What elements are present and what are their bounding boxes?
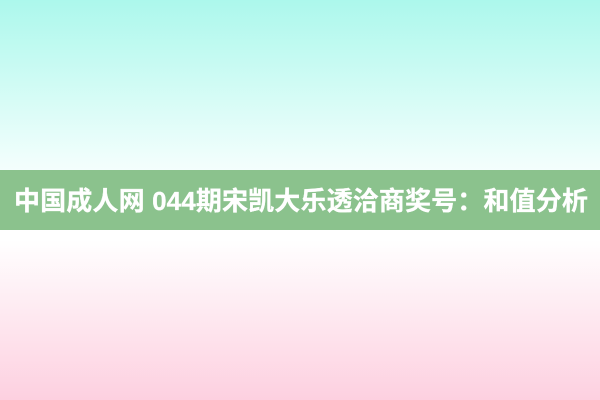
green title band: [0, 170, 600, 230]
title: 中国成人网 044期宋凯大乐透洽商奖号：和值分析: [14, 186, 588, 216]
